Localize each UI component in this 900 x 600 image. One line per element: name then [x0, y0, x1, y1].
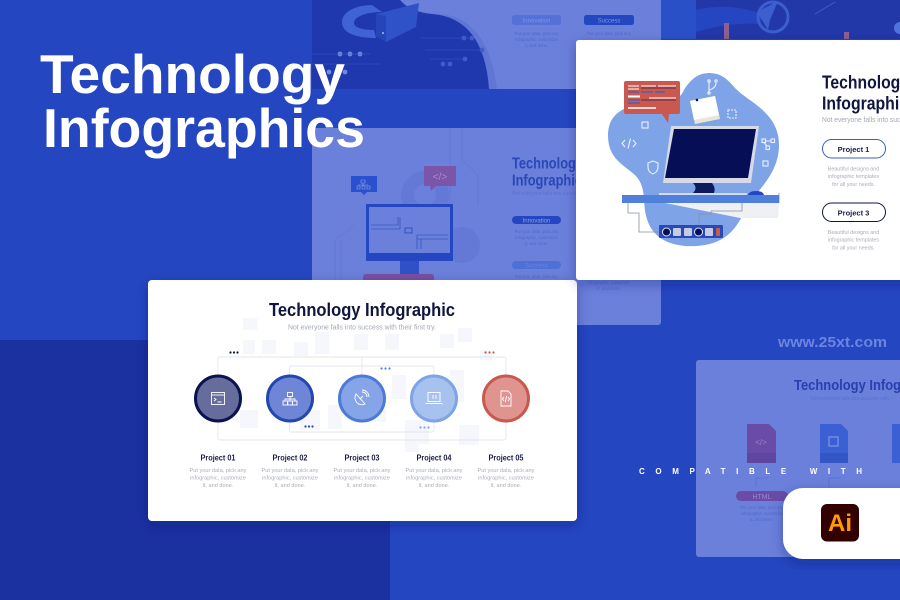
slide heading: Infographic: [512, 172, 582, 190]
button: Project 1: Project 1: [838, 145, 869, 154]
mouse: [748, 191, 764, 195]
project descriptions: infographic, customize: [190, 476, 246, 482]
icon: laptop: [426, 392, 442, 404]
text block: Put your data, pick any: [515, 274, 559, 279]
title: Technology: [40, 43, 345, 105]
project descriptions: it, and done.: [203, 483, 234, 489]
text block: infographic, customize: [741, 511, 784, 516]
text block: it, and done.: [597, 286, 621, 291]
pill: Success: [512, 261, 561, 269]
heading: [822, 72, 900, 114]
icon: hierarchy bubble: [351, 176, 377, 195]
project 04 circle: [412, 376, 456, 421]
checker pattern: [225, 318, 492, 452]
icon: code bubble: [424, 166, 456, 191]
icon: terminal: [212, 392, 224, 404]
compatible with label: COMPATIBLE WITH: [639, 467, 862, 476]
text block: infographic templates: [828, 174, 879, 180]
project labels: [200, 454, 524, 462]
text block: for all your needs.: [832, 246, 875, 252]
icon: satellite dish: [355, 390, 369, 405]
pill: HTML: HTML: [752, 494, 772, 501]
small icons: [622, 80, 774, 174]
title: Infographics: [43, 97, 365, 159]
heading: Technology Infographic: [269, 299, 455, 320]
text block: infographic templates: [828, 238, 879, 244]
project descriptions: [190, 468, 535, 489]
text block: it, and done.: [525, 43, 548, 48]
subtitle: Not everyone falls into success with their first try.: [288, 324, 436, 332]
top right fragment: [661, 0, 900, 39]
project descriptions: infographic, customize: [406, 476, 462, 482]
shadow and wires: [665, 203, 779, 218]
text block: Beautiful designs and: [828, 166, 879, 172]
project 02 circle: [268, 376, 312, 421]
project 03 circle: [340, 376, 384, 421]
text block: infographic, customize: [515, 37, 558, 42]
icon: blue file: [892, 424, 900, 463]
pill: HTML: [736, 491, 788, 501]
dots: black: [229, 351, 239, 354]
text block: Put your data, pick any: [587, 31, 632, 36]
watermark: www.25xt.com: [777, 334, 887, 351]
icon: hierarchy: [283, 392, 297, 405]
project labels: Project 02: [272, 454, 308, 462]
dots: blue top: [380, 367, 391, 370]
dots: red: [484, 351, 495, 354]
pill: Innovation: [512, 216, 561, 224]
dots: light blue: [419, 426, 430, 429]
icon: Adobe Illustrator: Ai: [828, 510, 852, 537]
button: Project 3: [822, 203, 886, 222]
project labels: Project 05: [488, 454, 524, 462]
project descriptions: it, and done.: [419, 483, 450, 489]
icon: purple file: [747, 424, 776, 463]
icon: code file: [501, 391, 511, 406]
dots: dark blue: [304, 425, 314, 428]
gears: [401, 171, 480, 263]
project labels: Project 01: [200, 454, 236, 462]
connector frames: [218, 357, 506, 440]
project descriptions: Put your data, pick any: [262, 468, 319, 474]
project descriptions: Put your data, pick any: [478, 468, 535, 474]
pill: Success: Success: [598, 18, 620, 24]
project 01 circle: [196, 376, 240, 421]
text block: Put your data, pick any: [515, 229, 559, 234]
text block: for all your needs.: [832, 182, 875, 188]
icon: code bubble: </>: [433, 172, 447, 183]
text block: [828, 166, 879, 188]
project descriptions: infographic, customize: [478, 476, 534, 482]
panel: faded slide middle: [312, 128, 661, 345]
button: Project 1: [822, 140, 886, 158]
panel: technology infographic card: [148, 280, 577, 521]
panel: Ai badge: [783, 488, 900, 559]
port strip: [659, 225, 723, 238]
text block: Put your data, pick any: [515, 31, 559, 36]
text block: [828, 230, 879, 252]
text block: Put your data, pick any: [740, 505, 785, 510]
text block: it, and done.: [525, 241, 548, 246]
icon: VR headset: [342, 3, 419, 42]
project descriptions: infographic, customize: [262, 476, 318, 482]
desk: [622, 195, 779, 203]
slide heading: Technology: [512, 156, 583, 172]
panel: faded slide top: [312, 0, 661, 89]
text block: [515, 31, 632, 48]
icon: Adobe Illustrator: [821, 504, 859, 542]
project descriptions: infographic, customize: [334, 476, 390, 482]
pill: Success: [584, 15, 634, 25]
project descriptions: Put your data, pick any: [406, 468, 463, 474]
circuit dots: [327, 36, 484, 74]
text block: [740, 505, 785, 522]
blob: [608, 73, 779, 246]
project descriptions: Put your data, pick any: [334, 468, 391, 474]
illustration: computer: [608, 73, 779, 246]
project descriptions: it, and done.: [347, 483, 378, 489]
pill: Innovation: [512, 15, 561, 25]
text block: Beautiful designs and: [828, 230, 879, 236]
pill: Success: Success: [525, 263, 548, 269]
text block: it, and done.: [750, 517, 774, 522]
panel: faded slide bottom right: [696, 360, 900, 557]
slide heading: [512, 156, 583, 190]
slide subtitle: Not everyone falls into success with: [810, 396, 889, 402]
project labels: Project 04: [416, 454, 452, 462]
pill: Innovation: Innovation: [523, 18, 550, 24]
panel: illustration card: [576, 40, 900, 280]
text block: [515, 229, 631, 291]
pill: Innovation: Innovation: [523, 218, 550, 224]
project descriptions: Put your data, pick any: [190, 468, 247, 474]
text block: infographic, customize: [588, 280, 631, 285]
icon: blue file: [820, 424, 848, 463]
project labels: Project 03: [344, 454, 380, 462]
title: [40, 43, 365, 159]
button: Project 3: Project 3: [838, 208, 869, 217]
icon: purple file: </>: [755, 438, 767, 447]
monitor: [363, 204, 453, 282]
project descriptions: it, and done.: [275, 483, 306, 489]
project 05 circle: [484, 376, 528, 421]
project descriptions: it, and done.: [491, 483, 522, 489]
monitor: [659, 126, 759, 196]
speech bubble: [624, 81, 680, 123]
note: [690, 96, 720, 124]
text block: infographic, customize: [515, 235, 558, 240]
slide subtitle: Not everyone falls into success: [512, 191, 581, 197]
